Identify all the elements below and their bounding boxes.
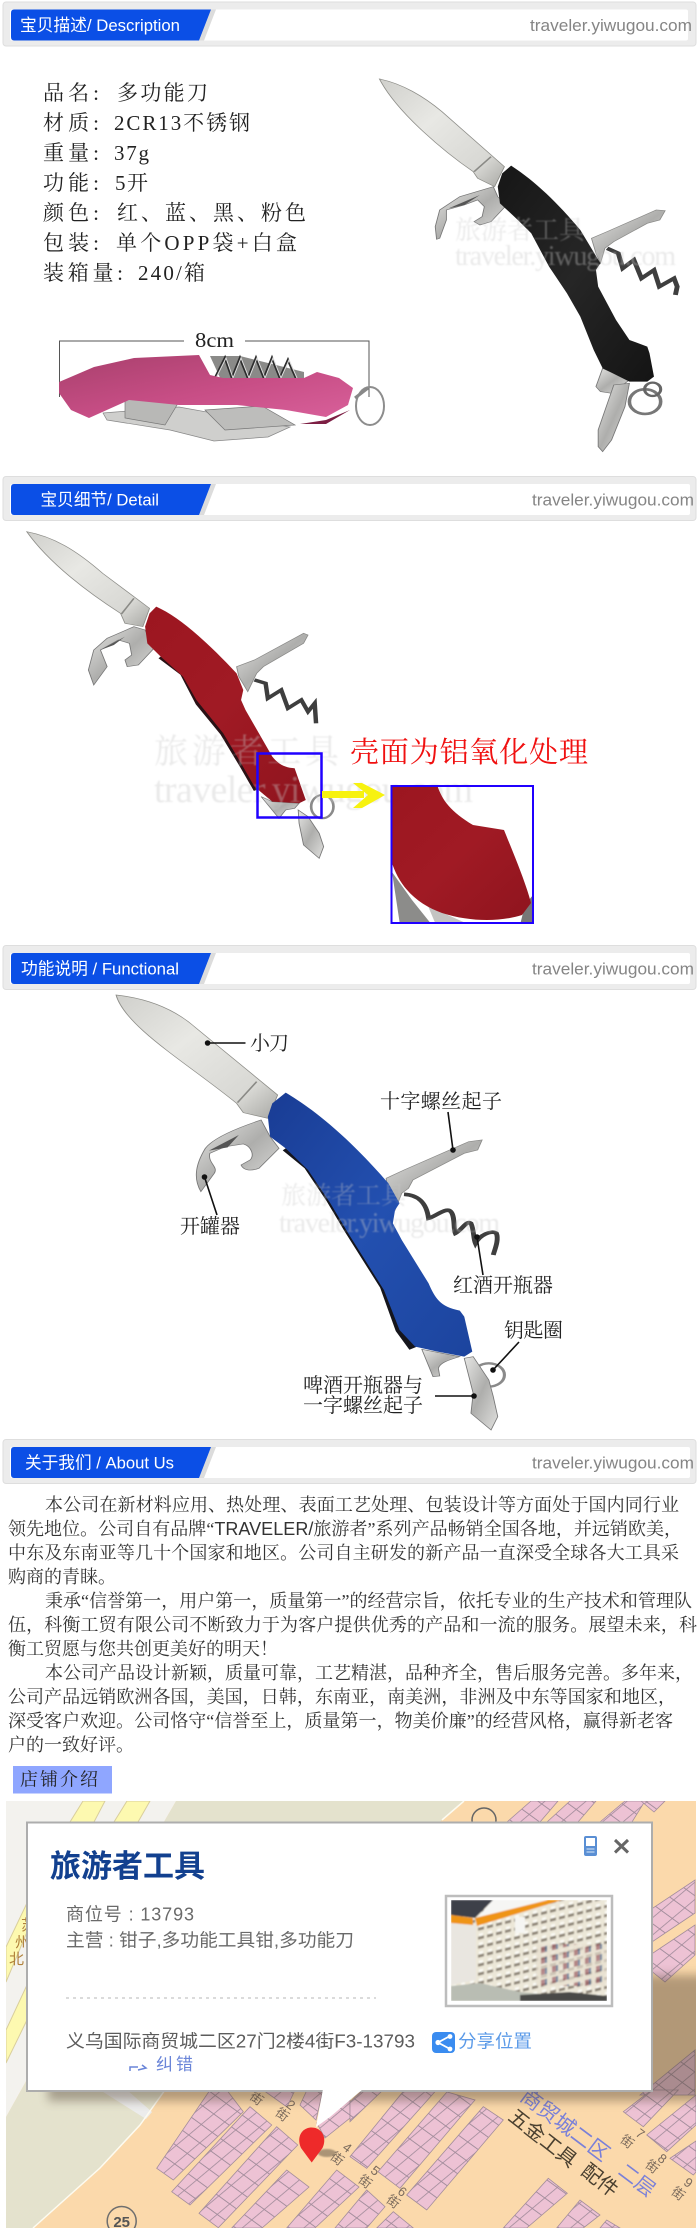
product specifications: 品名: bbox=[43, 81, 99, 105]
product specifications: 重量: bbox=[43, 141, 99, 165]
arrow: yellow bbox=[322, 783, 385, 808]
header: description bbox=[3, 2, 696, 46]
store name: 旅游者工具 bbox=[50, 1849, 205, 1884]
dimension line: 8cm bbox=[60, 328, 369, 397]
callout: bottle opener and flat screwdriver: 啤酒开瓶器与 bbox=[303, 1374, 423, 1397]
watermark: 旅游者工具 bbox=[455, 216, 586, 245]
callout: key ring bbox=[490, 1319, 563, 1373]
watermark: 旅游者工具 bbox=[281, 1182, 407, 1210]
header: detail bbox=[3, 476, 696, 520]
map blocks bbox=[157, 1801, 696, 2228]
store intro label bbox=[13, 1766, 112, 1794]
product specifications: 包装: bbox=[43, 231, 99, 255]
map place names: 二层 bbox=[614, 2160, 659, 2202]
map labels: 9 bbox=[681, 2174, 696, 2191]
highlight box on knife bbox=[258, 754, 322, 818]
product specifications bbox=[43, 81, 306, 285]
share location link: 分享位置 bbox=[458, 2032, 532, 2052]
map labels: 8 bbox=[655, 2150, 670, 2167]
pink knife photo bbox=[59, 355, 384, 441]
callout: bottle opener and flat screwdriver: 一字螺丝起子 bbox=[303, 1394, 423, 1417]
correction link: 纠错 bbox=[156, 2055, 193, 2074]
product specifications: 功能: bbox=[43, 171, 99, 195]
map labels: 2 bbox=[284, 2097, 298, 2113]
product specifications: 单个OPP袋+白盒 bbox=[116, 231, 297, 255]
product specifications: 37g bbox=[114, 141, 150, 165]
map pin bbox=[299, 2128, 336, 2162]
callout: bottle opener and flat screwdriver bbox=[303, 1374, 477, 1417]
magnified detail bbox=[391, 786, 533, 925]
watermark: traveler.yiwugou.com bbox=[455, 241, 676, 272]
info popup bbox=[27, 1822, 652, 2127]
company text: 购商的青睐。 bbox=[8, 1567, 116, 1587]
product specifications: 红、蓝、黑、粉色 bbox=[117, 201, 306, 225]
callout: corkscrew bbox=[453, 1234, 553, 1297]
map place names bbox=[9, 1808, 659, 2202]
header: functional: traveler.yiwugou.com bbox=[532, 960, 694, 978]
map labels: 街 bbox=[247, 2088, 266, 2108]
product specifications: 多功能刀 bbox=[117, 81, 208, 105]
company text: 衡工贸愿与您共创更美好的明天！ bbox=[8, 1639, 278, 1659]
watermark: traveler.yiwugou.com bbox=[154, 769, 473, 811]
product specifications: 装箱量: bbox=[43, 261, 123, 285]
icon: phone bbox=[584, 1836, 597, 1856]
correction link bbox=[130, 2055, 193, 2074]
store number: 商位号 : 13793 bbox=[66, 1904, 194, 1924]
panel: description bbox=[3, 2, 696, 452]
callout: phillips screwdriver: 十字螺丝起子 bbox=[380, 1090, 502, 1113]
store intro label: 店铺介绍 bbox=[20, 1770, 98, 1790]
map labels: 街 bbox=[356, 2172, 375, 2192]
company text: 深受客户欢迎。公司恪守“信誉至上，质量第一，物美价廉”的经营风格，赢得新老客 bbox=[8, 1711, 673, 1731]
popup shadow bbox=[48, 1975, 700, 2101]
product specifications: 材质: bbox=[43, 111, 99, 135]
red knife photo bbox=[27, 532, 333, 858]
company text: 户的一致好评。 bbox=[8, 1735, 134, 1755]
product specifications: 2CR13不锈钢 bbox=[114, 111, 250, 135]
callout: phillips screwdriver bbox=[380, 1090, 502, 1153]
company text bbox=[8, 1495, 697, 1755]
map labels: 街 bbox=[618, 2132, 637, 2152]
callout: key ring: 钥匙圈 bbox=[504, 1319, 563, 1342]
map place names: 五金工具 bbox=[504, 2105, 581, 2172]
header: description: traveler.yiwugou.com bbox=[530, 16, 692, 35]
header: functional: 功能说明 / Functional bbox=[21, 960, 179, 978]
company text: 伍，科衡工贸有限公司不断致力于为客户提供优秀的产品和一流的服务。展望未来，科 bbox=[8, 1615, 697, 1635]
map labels: 5 bbox=[368, 2162, 383, 2179]
map labels: 街 bbox=[328, 2149, 347, 2169]
address: 义乌国际商贸城二区27门2楼4街F3-13793 bbox=[66, 2032, 415, 2052]
header: detail: 宝贝细节/ Detail bbox=[40, 490, 159, 510]
map bbox=[6, 1801, 700, 2228]
dimension line: 8cm: 8cm bbox=[195, 328, 234, 352]
store photo bbox=[446, 1896, 612, 2006]
map labels: 7 bbox=[633, 2125, 648, 2142]
product specifications: 5开 bbox=[115, 171, 148, 195]
map labels bbox=[247, 2088, 696, 2212]
icon: share bbox=[432, 2032, 455, 2053]
company text: 公司产品远销欧洲各国，美国，日韩，东南亚，南美洲，非洲及中东等国家和地区， bbox=[8, 1686, 676, 1707]
header: about us bbox=[3, 1440, 696, 1484]
black knife photo bbox=[379, 79, 677, 452]
company text: 秉承“信誉第一，用户第一，质量第一”的经营宗旨，依托专业的生产技术和管理队 bbox=[45, 1591, 692, 1611]
map labels: 街 bbox=[384, 2192, 403, 2212]
company text: 本公司在新材料应用、热处理、表面工艺处理、包装设计等方面处于国内同行业 bbox=[45, 1495, 679, 1515]
product specifications: 240/箱 bbox=[138, 261, 205, 285]
map labels: 街 bbox=[273, 2105, 292, 2125]
header: about us: traveler.yiwugou.com bbox=[532, 1454, 694, 1472]
company text: 本公司产品设计新颖，质量可靠，工艺精湛，品种齐全，售后服务完善。多年来， bbox=[45, 1662, 693, 1683]
watermark bbox=[154, 733, 473, 811]
company text: 中东及东南亚等几十个国家和地区。公司自主研发的新产品一直深受全球各大工具采 bbox=[8, 1542, 679, 1563]
map labels: 街 bbox=[669, 2184, 688, 2204]
header: description: 宝贝描述/ Description bbox=[20, 16, 180, 35]
header: functional bbox=[3, 946, 696, 990]
callout text: 壳面为铝氧化处理 bbox=[350, 736, 588, 769]
watermark: traveler.yiwugou.com bbox=[279, 1208, 500, 1239]
product specifications: 颜色: bbox=[43, 201, 99, 225]
map place names: 苏州北 bbox=[9, 1917, 36, 1968]
watermark bbox=[455, 216, 676, 272]
callout: knife bbox=[205, 1032, 289, 1055]
company text: 领先地位。公司自有品牌“TRAVELER/旅游者”系列产品畅销全国各地，并远销欧美， bbox=[8, 1519, 682, 1539]
map place names: 商贸城二区 bbox=[516, 2085, 614, 2166]
header: detail: traveler.yiwugou.com bbox=[532, 490, 694, 510]
map labels: 街 bbox=[643, 2157, 662, 2177]
watermark: 旅游者工具 bbox=[154, 733, 341, 771]
callout: can opener bbox=[180, 1174, 240, 1238]
map place names: 配件 bbox=[577, 2159, 623, 2202]
magnified frame bbox=[392, 786, 533, 923]
main business: 主营 : 钳子,多功能工具钳,多功能刀 bbox=[66, 1930, 354, 1950]
route marker 25 bbox=[107, 2206, 136, 2228]
dotted divider bbox=[66, 1997, 376, 1999]
panel: detail bbox=[3, 476, 696, 925]
map labels: 4 bbox=[340, 2139, 355, 2156]
icon: close bbox=[615, 1840, 628, 1852]
map labels: 6 bbox=[395, 2183, 410, 2200]
callout: knife: 小刀 bbox=[250, 1032, 289, 1055]
watermark bbox=[279, 1182, 500, 1239]
callout: can opener: 开罐器 bbox=[180, 1215, 240, 1238]
header: about us: 关于我们 / About Us bbox=[25, 1454, 174, 1472]
panel: about us bbox=[3, 1440, 700, 2228]
blue knife photo bbox=[116, 995, 504, 1430]
callout: corkscrew: 红酒开瓶器 bbox=[453, 1274, 553, 1297]
panel: functional bbox=[3, 946, 696, 1430]
